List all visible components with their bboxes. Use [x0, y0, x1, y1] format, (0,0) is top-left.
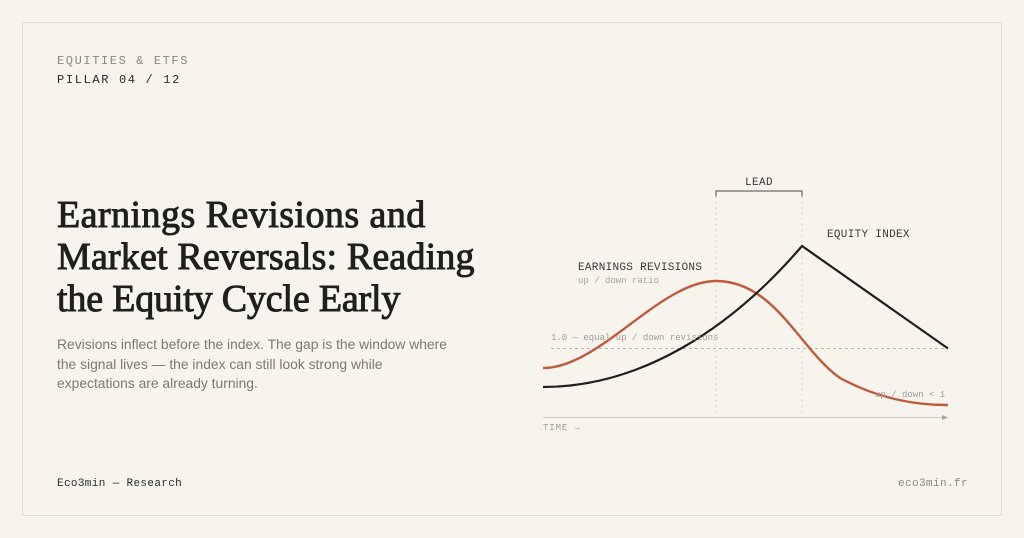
footer left: Eco3min — Research — [57, 478, 182, 490]
below one label: up / down < 1 — [875, 390, 945, 400]
title — [56, 194, 475, 320]
guide: revisions peak — [715, 191, 717, 415]
lead bracket — [716, 191, 802, 196]
threshold label: 1.0 — equal up / down revisions — [551, 333, 718, 343]
header eyebrow — [57, 54, 189, 87]
description: the signal lives — the index can still look strong while — [57, 356, 382, 372]
lead label: LEAD — [745, 177, 773, 189]
equity index label: EQUITY INDEX — [827, 229, 910, 241]
earnings revisions label: EARNINGS REVISIONS — [578, 262, 702, 274]
pillar label: PILLAR 04 / 12 — [57, 73, 181, 87]
description: expectations are already turning. — [57, 375, 258, 391]
description — [57, 336, 447, 391]
title: Earnings Revisions and — [57, 194, 426, 236]
time axis — [543, 415, 948, 420]
description: Revisions inflect before the index. The gap is the window where — [57, 336, 447, 352]
footer right: eco3min.fr — [898, 478, 968, 490]
title: Market Reversals: Reading — [57, 236, 475, 278]
guide: index peak — [801, 191, 803, 415]
threshold line — [551, 348, 948, 350]
ratio sublabel: up / down ratio — [578, 276, 659, 286]
category label: EQUITIES & ETFS — [57, 54, 189, 68]
earnings revisions curve — [543, 281, 948, 405]
time label: TIME → — [543, 423, 581, 433]
equity index curve — [543, 246, 948, 387]
title: the Equity Cycle Early — [57, 278, 400, 320]
